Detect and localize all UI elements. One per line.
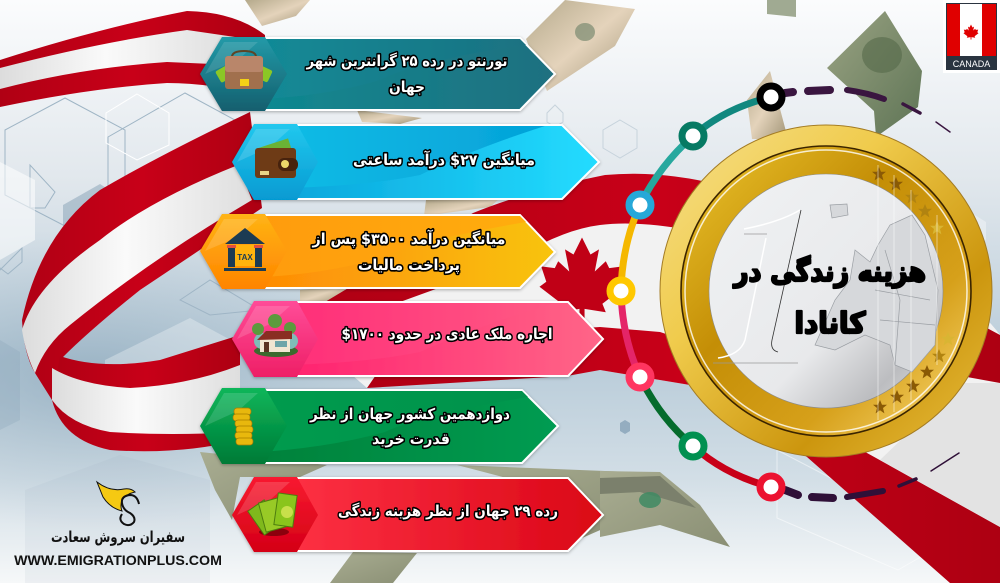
logo bbox=[14, 482, 222, 569]
icon: tax bank bbox=[224, 228, 266, 271]
coin title: کانادا bbox=[794, 306, 866, 340]
panel: cost of living rank bbox=[232, 477, 603, 552]
text: Toronto ranking bbox=[306, 52, 508, 96]
coin bbox=[660, 125, 992, 457]
timeline nodes bbox=[610, 86, 782, 498]
large numeral 1 bbox=[713, 210, 801, 363]
text: purchasing power: قدرت خرید bbox=[372, 430, 450, 448]
timeline arc bbox=[621, 90, 959, 498]
icon: house with trees bbox=[252, 314, 298, 357]
text: income after tax bbox=[312, 230, 506, 275]
maple leaf on ribbon bbox=[540, 238, 624, 322]
dashed arc, bottom bbox=[785, 453, 959, 498]
text: income after tax: میانگین درآمد ۳۵۰۰$ پس از bbox=[312, 230, 506, 249]
text: hourly wage: میانگین ۲۷$ درآمد ساعتی bbox=[353, 151, 535, 169]
red and white ribbon, right side bbox=[300, 174, 1000, 583]
coin title bbox=[732, 255, 926, 340]
red and white ribbon, left side bbox=[0, 11, 265, 451]
map of Europe bbox=[815, 204, 938, 372]
flag of Canada bbox=[943, 0, 1000, 73]
coin title: هزینه زندگی در bbox=[732, 255, 926, 288]
dashed arc, top bbox=[785, 90, 950, 132]
hexagon: hourly wage bbox=[232, 124, 318, 200]
hexagon: Toronto bbox=[200, 37, 287, 111]
hexagon: income after tax bbox=[200, 214, 287, 289]
text: rent: اجاره ملک عادی در حدود ۱۷۰۰$ bbox=[342, 325, 552, 343]
text: purchasing power bbox=[309, 405, 510, 448]
panel: income after tax bbox=[200, 214, 555, 289]
icon: briefcase bbox=[215, 51, 273, 89]
text: Toronto ranking: جهان bbox=[389, 78, 425, 96]
panel: purchasing power bbox=[200, 388, 558, 464]
icon: tax bank: TAX bbox=[237, 253, 253, 262]
panel: rent bbox=[232, 301, 603, 377]
text: cost of living rank: رده ۲۹ جهان از نظر هزینه زندگی bbox=[338, 502, 558, 520]
icon: coin stack bbox=[233, 408, 253, 445]
flag of Canada: CANADA bbox=[953, 59, 990, 69]
stars bbox=[872, 167, 955, 413]
company name: سفیران سروش سعادت bbox=[51, 528, 185, 546]
hexagon: rent bbox=[232, 301, 318, 377]
text: income after tax: پرداخت مالیات bbox=[358, 256, 460, 275]
icon: banknotes bbox=[248, 493, 297, 536]
text: Toronto ranking: تورنتو در رده ۲۵ گرانترین شهر bbox=[306, 52, 508, 70]
panel: hourly wage bbox=[232, 124, 599, 200]
panel: Toronto ranking bbox=[200, 37, 555, 111]
hexagon: cost of living rank bbox=[232, 477, 318, 552]
icon: wallet bbox=[255, 138, 298, 178]
hexagon: purchasing power bbox=[200, 388, 287, 464]
website: WWW.EMIGRATIONPLUS.COM bbox=[14, 553, 222, 569]
text: purchasing power: دوازدهمین کشور جهان از نظر bbox=[309, 405, 510, 423]
money bills bbox=[200, 0, 1000, 583]
icon: phoenix bbox=[97, 482, 139, 525]
